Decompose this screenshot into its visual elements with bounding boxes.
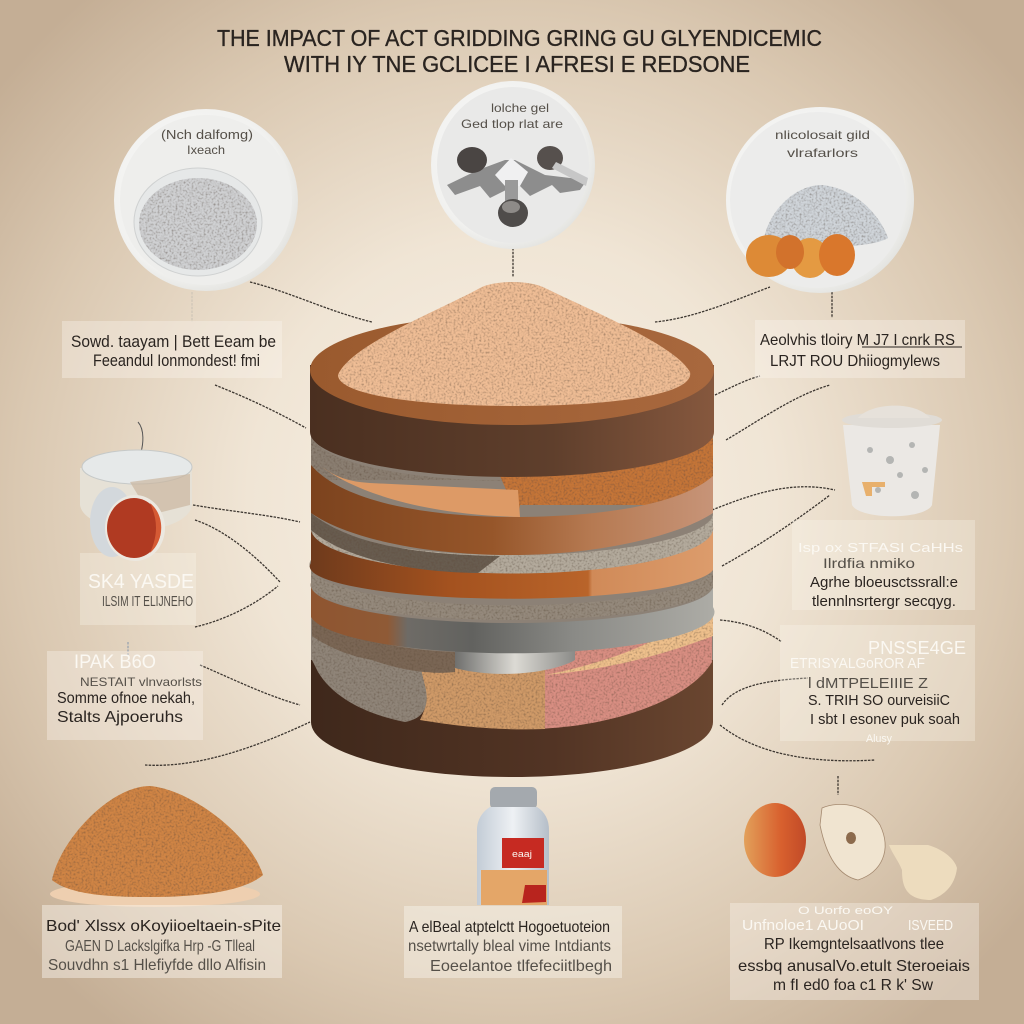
circle: left powder dish	[114, 109, 298, 291]
text box: right lower: Alusy	[866, 733, 892, 745]
text box: right middle: Ilrdfia nmiko	[823, 555, 915, 571]
icon: orange fruit	[746, 234, 855, 278]
band 3 metal	[311, 583, 714, 653]
text box: top right: LRJT ROU Dhiiogmylews	[770, 353, 940, 370]
text box: left middle: SK4 YASDE	[88, 571, 194, 593]
grain mound	[50, 786, 263, 907]
metal disc	[455, 650, 575, 674]
grey layer 1	[311, 433, 713, 481]
label: right circle: vlrafarlors	[787, 146, 858, 160]
text box: right lower: I sbt I esonev puk soah	[810, 711, 960, 728]
text box: left lower: Somme ofnoe nekah,	[57, 690, 195, 707]
text box: top right: Aeolvhis tloiry M J7 I cnrk RS	[760, 332, 955, 349]
upper rim top	[310, 315, 714, 425]
text box: left middle: ILSIM IT ELIJNEHO	[102, 593, 193, 610]
text box: bottom right: Unfnoloe1 AUoOI	[742, 917, 864, 934]
label: left circle: (Nch dalfomg)	[161, 127, 253, 142]
title	[217, 25, 822, 77]
text box: left middle	[80, 553, 196, 625]
light orange top	[322, 467, 520, 517]
bottom left grey lump	[312, 625, 427, 722]
tan textured layer	[415, 668, 545, 729]
grey layer 3	[309, 560, 713, 620]
text box: right lower: l dMTPELEIIIE Z	[808, 675, 928, 692]
band 1 brown	[311, 465, 713, 555]
text box: bottom right: RP Ikemgntelsaatlvons tlee	[764, 936, 944, 953]
icon: powder dish	[134, 168, 262, 276]
text box: bottom right	[730, 903, 979, 1000]
label: right circle	[775, 128, 870, 160]
supplement bottle: eaaj	[512, 849, 532, 859]
icon: powder mound	[764, 185, 888, 247]
text box: left lower: NESTAIT vlnvaorlsts	[80, 675, 202, 689]
text box: bottom right: ISVEED	[908, 917, 953, 934]
text box: top left	[62, 321, 282, 378]
layered cylinder	[309, 282, 714, 777]
connector lines	[128, 248, 875, 795]
text box: bottom right: essbq anusalVo.etult Steroeiais	[738, 958, 970, 975]
text box: right lower	[780, 625, 975, 745]
text box: bottom left: GAEN D Lackslgifka Hrp -G Tlleal	[65, 938, 255, 955]
text box: right middle: tlennlnsrtergr secqyg.	[812, 593, 956, 610]
text box: right lower: ETRISYALGoROR AF	[790, 655, 925, 672]
brown grey under metal	[312, 615, 455, 673]
band 2 orange	[310, 527, 713, 599]
text box: left lower	[47, 651, 203, 740]
text box: top left: Sowd. taayam | Bett Eeam be	[71, 332, 276, 351]
label: right circle: nlicolosait gild	[775, 128, 870, 142]
label: center circle	[461, 101, 563, 131]
text box: bottom left: Souvdhn s1 Hlefiyfde dllo Alfisin	[48, 957, 266, 974]
circle: right powder and fruit	[726, 107, 914, 293]
base band	[311, 660, 713, 777]
text box: right lower: S. TRIH SO ourveisiiC	[808, 692, 950, 709]
text box: bottom center: Eoeelantoe tlfefeciitlbegh	[430, 958, 612, 975]
grain pile	[338, 282, 690, 406]
text box: right lower: PNSSE4GE	[868, 638, 966, 658]
text box: right middle	[792, 520, 975, 610]
pink textured layer	[530, 620, 712, 729]
yogurt cup	[842, 406, 942, 516]
label: left circle: Ixeach	[187, 143, 225, 157]
text box: right middle: Isp ox STFASI CaHHs	[798, 540, 964, 555]
orange textured top	[500, 438, 713, 517]
text box: bottom center: A elBeal atptelctt Hogoetuoteion	[409, 919, 610, 936]
text box: bottom right: O Uorfo eoOY	[798, 905, 894, 917]
text box: top right	[755, 320, 965, 378]
title: WITH IY TNE GCLICEE I AFRESI E REDSONE	[284, 51, 750, 77]
text box: bottom center	[404, 906, 622, 978]
text box: bottom right: m fI ed0 foa c1 R k' Sw	[773, 977, 933, 994]
grey layer 2 dark part	[311, 513, 500, 573]
text box: bottom center: nsetwrtally bleal vime Intdiants	[408, 938, 611, 955]
glass jar with red lid	[80, 422, 192, 561]
supplement bottle	[477, 787, 549, 905]
label: center circle: lolche gel	[491, 101, 549, 115]
cylinder backing	[311, 420, 713, 720]
grey layer 2 light	[311, 513, 713, 574]
text box: left lower: IPAK B6O	[74, 652, 156, 673]
text box: bottom left: Bod' Xlssx oKoyiioeltaein-sPite	[46, 918, 281, 935]
icon: grinder mechanism	[447, 146, 588, 227]
fruit: mango and pear slices	[744, 803, 957, 900]
label: left circle	[161, 127, 253, 157]
label: center circle: Ged tlop rlat are	[461, 117, 563, 131]
text box: top left: Feeandul Ionmondest! fmi	[93, 351, 260, 370]
text box: left lower: Stalts Ajpoeruhs	[57, 709, 183, 726]
text box: right middle: Agrhe bloeusctssrall:e	[810, 574, 958, 591]
text box: bottom left	[42, 905, 282, 978]
cream layer	[545, 590, 713, 675]
upper rim side	[310, 365, 714, 477]
circle: center grinder	[431, 81, 595, 249]
title: THE IMPACT OF ACT GRIDDING GRING GU GLYENDICEMIC	[217, 25, 822, 51]
